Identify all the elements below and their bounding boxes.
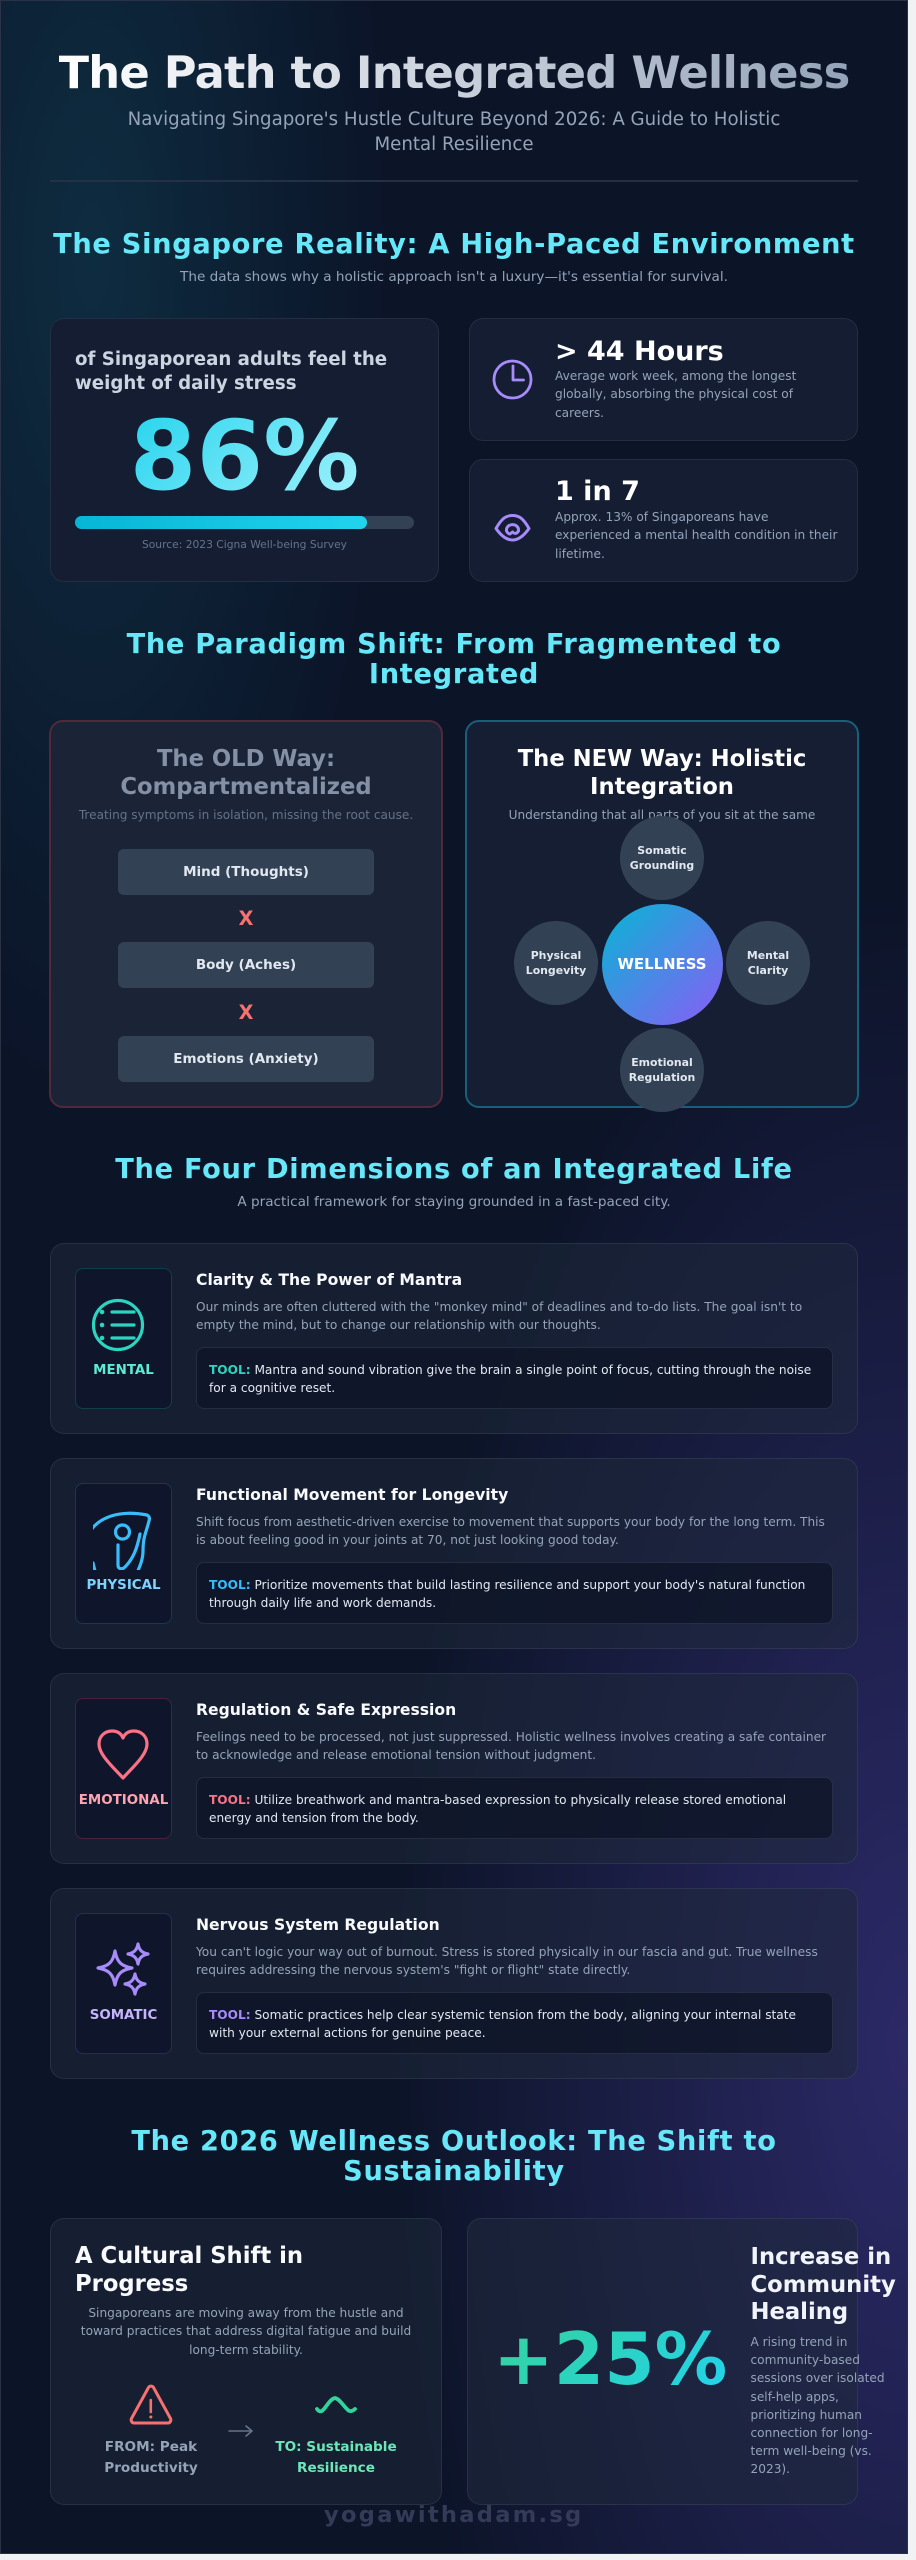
tool callout: somatic xyxy=(196,1992,833,2054)
community healing heading: Increase in xyxy=(750,2244,891,2270)
community healing description: community-based xyxy=(750,2353,860,2367)
subtitle: Navigating Singapore's Hustle Culture Beyond 2026: A Guide to Holistic xyxy=(128,109,780,130)
heading: four dimensions: The Four Dimensions of an Integrated Life xyxy=(115,1154,793,1185)
tool callout: physical: TOOL: Prioritize movements that build lasting resilience and support your body's natural function xyxy=(209,1578,805,1592)
node: somatic grounding: Grounding xyxy=(630,859,694,872)
new way heading: The NEW Way: Holistic xyxy=(518,746,806,772)
dimension description: emotional: Feelings need to be processed, not just suppressed. Holistic wellness involves creating a safe container xyxy=(196,1730,826,1744)
node: somatic grounding: Somatic xyxy=(637,844,687,857)
node: emotional regulation: Emotional xyxy=(631,1056,693,1069)
panel: somatic dimension xyxy=(50,1888,858,2079)
new way heading xyxy=(518,746,806,800)
subtitle xyxy=(128,109,780,155)
icon: sparkles xyxy=(96,1942,150,1996)
box: emotions xyxy=(118,1036,374,1082)
panel: 86% stress statistic xyxy=(50,318,439,582)
progress fill 86% xyxy=(75,516,367,529)
label: somatic: SOMATIC xyxy=(90,2008,157,2023)
community healing description: prioritizing human xyxy=(750,2408,862,2422)
icon tile: emotional xyxy=(75,1698,172,1839)
node: somatic grounding xyxy=(620,816,704,900)
subtitle: Mental Resilience xyxy=(374,134,534,155)
community healing description: connection for long- xyxy=(750,2426,873,2440)
label: from peak productivity: Productivity xyxy=(104,2460,198,2476)
community healing heading: Healing xyxy=(750,2299,848,2325)
tool callout: emotional: energy and tension from the body. xyxy=(209,1811,419,1825)
title: The Path to Integrated Wellness xyxy=(59,46,849,99)
separator x: X xyxy=(239,907,253,930)
icon tile: somatic xyxy=(75,1913,172,2054)
node: mental clarity: Clarity xyxy=(748,964,788,977)
label: from peak productivity xyxy=(104,2438,198,2476)
old way heading: The OLD Way: xyxy=(157,746,335,772)
label: to sustainable resilience: Resilience xyxy=(297,2460,375,2476)
dimension description: emotional xyxy=(196,1730,826,1762)
dimension description: emotional: to acknowledge and release emotional tension without judgment. xyxy=(196,1748,596,1762)
dimension description: physical xyxy=(196,1515,825,1547)
big number +25%: +25% xyxy=(493,2318,727,2402)
heading: paradigm shift: The Paradigm Shift: From Fragmented to xyxy=(127,629,781,660)
big number 86%: 86% xyxy=(130,400,359,512)
dimension description: somatic xyxy=(196,1945,818,1977)
dimension description: mental: empty the mind, but to change our relationship with our thoughts. xyxy=(196,1318,601,1332)
panel: new way xyxy=(465,720,859,1108)
panel: mental dimension xyxy=(50,1243,858,1434)
stat value: 1 in 7: 1 in 7 xyxy=(555,476,640,507)
node: physical longevity: Physical xyxy=(531,949,581,962)
tool callout: somatic: TOOL: Somatic practices help clear systemic tension from the body, aligning your internal state xyxy=(209,2008,796,2022)
separator x: X xyxy=(239,1001,253,1024)
community healing heading xyxy=(750,2244,896,2325)
dimension description: physical: Shift focus from aesthetic-driven exercise to movement that supports your body for the long term. This xyxy=(196,1515,825,1529)
cultural shift heading xyxy=(75,2243,303,2296)
stat caption: weight of daily stress xyxy=(75,373,297,394)
label: emotional: EMOTIONAL xyxy=(79,1793,168,1808)
section intro: four dimensions: A practical framework for staying grounded in a fast-paced city. xyxy=(237,1194,671,1210)
old way description: Treating symptoms in isolation, missing the root cause. xyxy=(79,808,413,822)
node: mental clarity xyxy=(726,921,810,1005)
stat description: hours: Average work week, among the longest xyxy=(555,369,796,383)
community healing description: A rising trend in xyxy=(750,2335,847,2349)
label: to sustainable resilience: TO: Sustainable xyxy=(275,2438,397,2454)
stat description: hours: globally, absorbing the physical cost of xyxy=(555,387,793,401)
box: mind xyxy=(118,849,374,895)
tool callout: physical: through daily life and work demands. xyxy=(209,1596,436,1610)
icon tile: mental xyxy=(75,1268,172,1409)
box: body xyxy=(118,942,374,988)
panel: old way xyxy=(49,720,443,1108)
icon: clock xyxy=(492,360,532,400)
stat caption: of Singaporean adults feel the xyxy=(75,349,387,370)
label: from peak productivity: FROM: Peak xyxy=(105,2438,197,2454)
community healing description: term well-being (vs. xyxy=(750,2444,872,2458)
icon: physical rocket xyxy=(93,1512,152,1570)
panel: emotional dimension xyxy=(50,1673,858,1864)
stat caption xyxy=(75,349,387,394)
node: physical longevity xyxy=(514,921,598,1005)
label: physical: PHYSICAL xyxy=(86,1578,161,1593)
tool callout: mental: for a cognitive reset. xyxy=(209,1381,335,1395)
old way heading: Compartmentalized xyxy=(120,774,372,800)
cultural shift description: toward practices that address digital fatigue and build xyxy=(81,2324,411,2338)
dimension title: emotional: Regulation & Safe Expression xyxy=(196,1701,456,1719)
cultural shift description xyxy=(81,2306,411,2357)
dimension description: somatic: You can't logic your way out of burnout. Stress is stored physically in our fascia and gut. True wellness xyxy=(196,1945,818,1959)
panel: community healing xyxy=(467,2218,858,2505)
stat value: hours: > 44 Hours xyxy=(555,336,724,367)
new way heading: Integration xyxy=(590,774,734,800)
community healing description: 2023). xyxy=(750,2462,790,2476)
heading: Singapore reality: The Singapore Reality: A High-Paced Environment xyxy=(53,229,855,260)
node: emotional regulation: Regulation xyxy=(629,1071,695,1084)
label: to sustainable resilience xyxy=(275,2438,397,2476)
box: emotions: Emotions (Anxiety) xyxy=(173,1051,319,1067)
icon tile: physical xyxy=(75,1483,172,1624)
heading: outlook: Sustainability xyxy=(343,2156,565,2187)
stat description: hours: careers. xyxy=(555,406,604,420)
node: physical longevity: Longevity xyxy=(526,964,586,977)
box: body: Body (Aches) xyxy=(196,957,296,973)
cultural shift heading: A Cultural Shift in xyxy=(75,2243,303,2269)
community healing description: sessions over isolated xyxy=(750,2371,885,2385)
dimension description: mental: Our minds are often cluttered with the "monkey mind" of deadlines and to-do lists. The goal isn't to xyxy=(196,1300,802,1314)
heading: paradigm shift xyxy=(126,629,781,690)
stat description: 1 in 7: experienced a mental health condition in their xyxy=(555,528,837,542)
node: wellness centre xyxy=(602,904,722,1024)
node: emotional regulation xyxy=(620,1028,704,1112)
tool callout: mental xyxy=(196,1347,833,1409)
cultural shift heading: Progress xyxy=(75,2270,188,2296)
icon: heart xyxy=(97,1729,149,1780)
stat description: 1 in 7 xyxy=(555,510,838,561)
heading: outlook xyxy=(131,2126,777,2187)
dimension description: physical: is about feeling good in your joints at 70, not just looking good today. xyxy=(196,1533,619,1547)
stat description: 1 in 7: lifetime. xyxy=(555,547,605,561)
dimension title: somatic: Nervous System Regulation xyxy=(196,1916,440,1934)
stat description: hours xyxy=(555,369,796,420)
dimension description: somatic: requires addressing the nervous system's "fight or flight" state directly. xyxy=(196,1963,630,1977)
panel: work hours statistic xyxy=(469,318,858,441)
source note: Source: 2023 Cigna Well-being Survey xyxy=(142,538,347,551)
panel: mental health statistic xyxy=(469,459,858,582)
progress bar xyxy=(75,516,414,529)
heading: paradigm shift: Integrated xyxy=(369,659,539,690)
cultural shift description: Singaporeans are moving away from the hustle and xyxy=(88,2306,404,2320)
old way heading xyxy=(120,746,372,800)
icon: mental list circle xyxy=(92,1298,144,1352)
community healing description xyxy=(750,2335,885,2476)
dimension title: mental: Clarity & The Power of Mantra xyxy=(196,1271,462,1289)
icon: eye xyxy=(494,514,530,542)
dimension title: physical: Functional Movement for Longevity xyxy=(196,1486,508,1504)
new way description: Understanding that all parts of you sit at the same xyxy=(509,808,815,822)
tool callout: mental: TOOL: Mantra and sound vibration give the brain a single point of focus, cutting through the noise xyxy=(209,1362,811,1376)
community healing heading: Community xyxy=(750,2272,896,2298)
section intro: Singapore reality: The data shows why a holistic approach isn't a luxury—it's essential for survival. xyxy=(180,269,728,285)
tool callout: emotional xyxy=(196,1777,833,1839)
dimension description: mental xyxy=(196,1300,802,1332)
label: mental: MENTAL xyxy=(93,1363,154,1378)
stat description: 1 in 7: Approx. 13% of Singaporeans have xyxy=(555,510,768,524)
icon: sustainable wave xyxy=(315,2396,357,2414)
icon: warning triangle xyxy=(130,2384,172,2424)
heading: outlook: The 2026 Wellness Outlook: The Shift to xyxy=(131,2126,777,2157)
cultural shift description: long-term stability. xyxy=(189,2343,303,2357)
watermark: yogawithadam.sg xyxy=(324,2502,583,2528)
box: mind: Mind (Thoughts) xyxy=(183,864,309,880)
panel: physical dimension xyxy=(50,1458,858,1649)
tool callout: physical xyxy=(196,1562,833,1624)
tool callout: somatic: with your external actions for genuine peace. xyxy=(209,2026,486,2040)
panel: cultural shift xyxy=(50,2218,442,2505)
tool callout: emotional: TOOL: Utilize breathwork and mantra-based expression to physically release stored emotional xyxy=(209,1792,786,1806)
community healing description: self-help apps, xyxy=(750,2390,839,2404)
node: wellness centre: WELLNESS xyxy=(618,954,706,972)
arrow xyxy=(228,2425,253,2437)
node: mental clarity: Mental xyxy=(747,949,789,962)
header divider xyxy=(50,180,858,182)
